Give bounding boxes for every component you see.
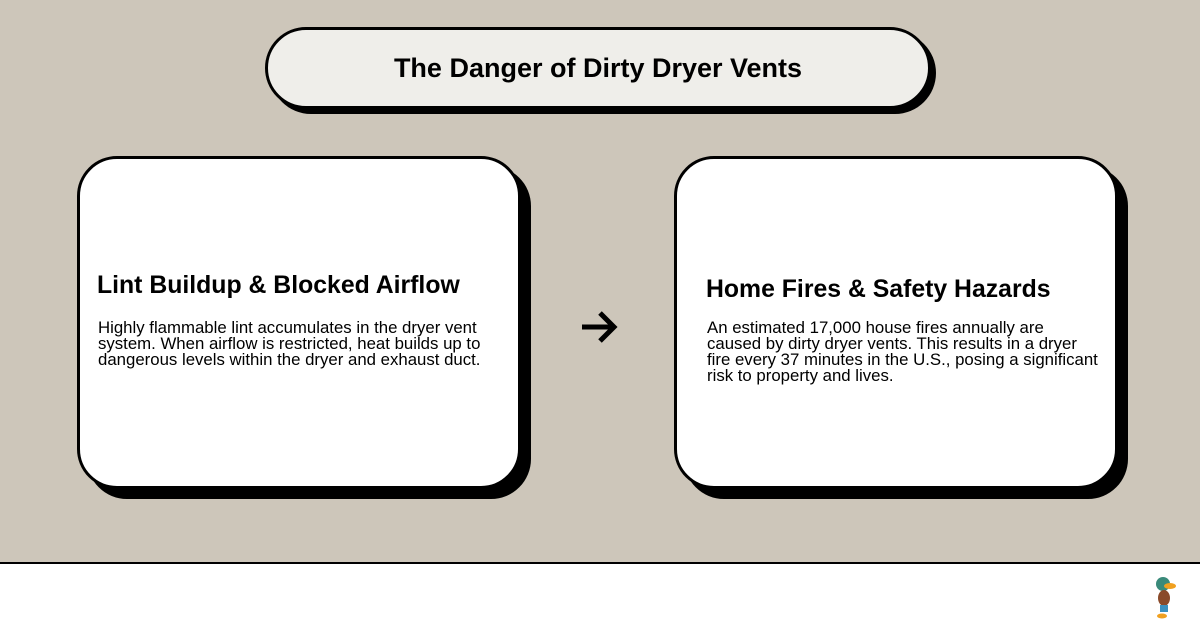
text: lint description: Highly flammable lint accumulates in the dryer vent [98, 318, 477, 337]
text: fires description: fire every 37 minutes in the U.S., posing a significant [707, 350, 1098, 369]
heading: lint buildup: Lint Buildup & Blocked Airflow [97, 272, 460, 299]
panel: home fires [674, 156, 1118, 489]
arrow [582, 311, 618, 343]
text: fires description: caused by dirty dryer vents. This results in a dryer [707, 334, 1077, 353]
footer [0, 562, 1200, 630]
title [265, 27, 931, 109]
icon: mascot [1156, 577, 1176, 618]
text: lint description: dangerous levels within the dryer and exhaust duct. [98, 350, 480, 369]
title: The Danger of Dirty Dryer Vents [394, 52, 802, 82]
text: fires description: risk to property and lives. [707, 366, 894, 385]
text: lint description [98, 318, 480, 369]
panel: lint buildup [77, 156, 521, 489]
text: lint description: system. When airflow is restricted, heat builds up to [98, 334, 480, 353]
text: fires description [707, 318, 1098, 385]
heading: home fires: Home Fires & Safety Hazards [706, 276, 1051, 303]
text: fires description: An estimated 17,000 house fires annually are [707, 318, 1044, 337]
